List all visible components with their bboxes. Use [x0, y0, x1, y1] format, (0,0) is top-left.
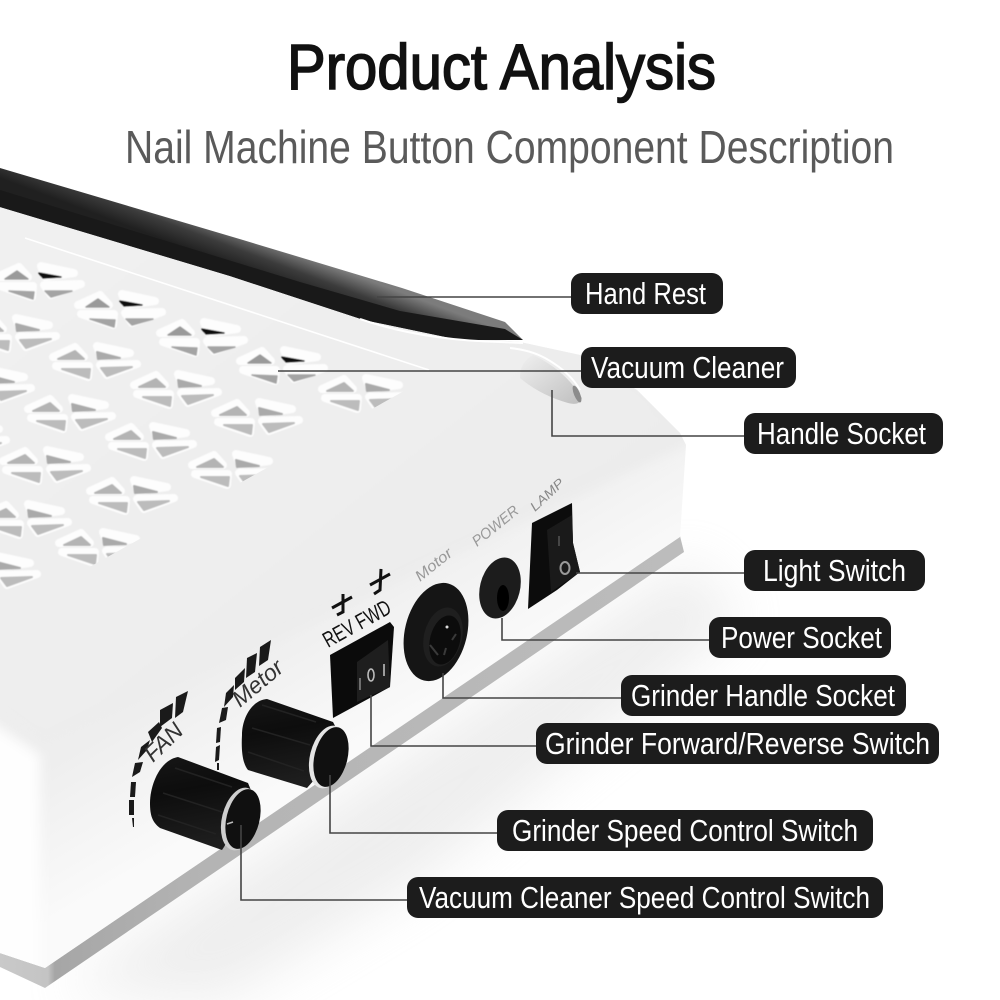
- connector: grinder speed: [330, 775, 497, 833]
- connector: hand rest: [377, 296, 571, 298]
- metor speed scale: [215, 640, 271, 770]
- connector: handle socket: [552, 390, 744, 436]
- connector: power socket: [502, 618, 709, 640]
- label: handle socket: Handle Socket: [757, 416, 926, 451]
- rev fwd label: REV FWD: [318, 595, 395, 652]
- mesh highlight line: [25, 238, 429, 370]
- label: grinder forward reverse switch: Grinder Forward/Reverse Switch: [545, 726, 930, 761]
- nail machine body: [0, 168, 700, 990]
- power label: POWER: [469, 502, 522, 550]
- power socket: [473, 553, 527, 623]
- label: grinder speed control switch: Grinder Speed Control Switch: [512, 813, 858, 848]
- lamp switch: [528, 503, 580, 609]
- label: hand rest: Hand Rest: [585, 276, 706, 311]
- label: light switch: Light Switch: [763, 553, 906, 588]
- base strip: [0, 536, 684, 988]
- connector: light switch: [576, 572, 744, 574]
- reversing switch symbols: [332, 569, 390, 615]
- lamp label: LAMP: [527, 475, 567, 514]
- fan speed scale: [129, 691, 188, 827]
- handle socket opening: [510, 348, 583, 404]
- label: power socket: Power Socket: [721, 620, 882, 655]
- motor label: Motor: [412, 544, 457, 585]
- connector: vacuum cleaner: [278, 370, 581, 372]
- label: vacuum cleaner speed control switch: Vacuum Cleaner Speed Control Switch: [419, 880, 870, 915]
- title: Product Analysis: [287, 31, 716, 103]
- label: grinder handle socket: Grinder Handle Socket: [631, 678, 895, 713]
- hand rest: [0, 168, 523, 343]
- fan label: FAN: [138, 717, 188, 767]
- floor shadow: [60, 560, 740, 1000]
- body faces: [0, 180, 700, 990]
- connector: forward reverse switch: [371, 695, 536, 746]
- connector: grinder handle socket: [443, 673, 621, 698]
- connector: vacuum speed: [241, 825, 407, 900]
- forward reverse switch: [330, 622, 394, 718]
- label: vacuum cleaner: Vacuum Cleaner: [591, 350, 784, 385]
- vent mesh: [0, 266, 406, 588]
- metor knob: [242, 699, 354, 792]
- fan knob: [150, 757, 266, 854]
- metor label: Metor: [227, 653, 289, 712]
- motor socket: [394, 576, 478, 688]
